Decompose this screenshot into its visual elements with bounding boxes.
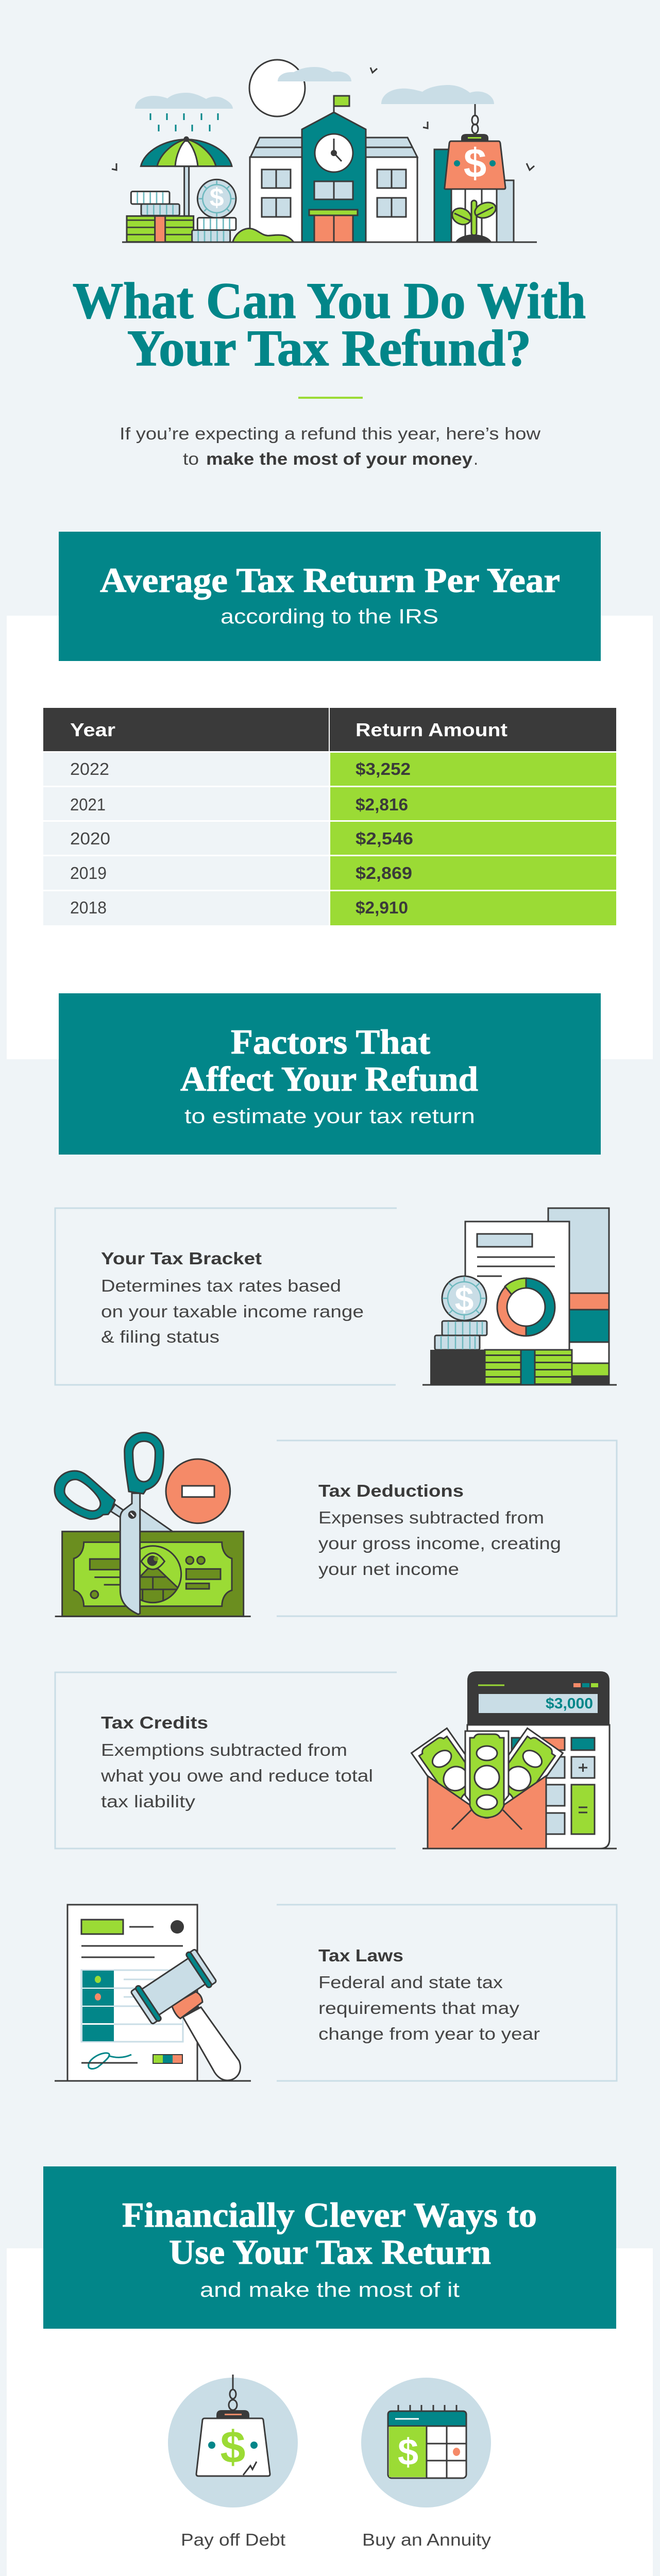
heading: financially clever ways: Financially Clever Ways to bbox=[122, 2195, 537, 2234]
icon: legal document with gavel bbox=[55, 1905, 251, 2081]
heading: factors: Factors That bbox=[231, 1022, 430, 1061]
row 2022: $3,252 bbox=[356, 759, 411, 778]
row 2019: $2,869 bbox=[356, 863, 412, 883]
ground line bbox=[122, 241, 537, 243]
table header: Return Amount bbox=[356, 719, 507, 740]
panel: tax credits bbox=[55, 1672, 397, 1849]
panel: your tax bracket: & filing status bbox=[101, 1327, 219, 1346]
row 2020 bbox=[43, 822, 616, 855]
panel: financially clever ways backdrop bbox=[7, 2248, 653, 2576]
icon: umbrella, coin stacks, cash and bush: $ bbox=[210, 183, 224, 212]
icon: school building bbox=[250, 95, 417, 242]
panel: tax deductions: your net income bbox=[318, 1560, 459, 1579]
panel: tax laws: requirements that may bbox=[318, 1998, 520, 2018]
intro text bbox=[120, 424, 540, 468]
row 2019: 2019 bbox=[70, 863, 107, 883]
hero illustration: town with clock tower, umbrella and weight bbox=[112, 60, 537, 242]
table header bbox=[43, 708, 616, 751]
icon: cloud right bbox=[381, 85, 494, 104]
intro text: to bbox=[183, 449, 199, 468]
row 2019 bbox=[43, 856, 616, 890]
panel: tax deductions: Expenses subtracted from bbox=[318, 1508, 544, 1527]
intro text: . bbox=[473, 449, 478, 468]
item: pay off debt: $ bbox=[221, 2421, 245, 2472]
title: What Can You Do With bbox=[73, 272, 586, 329]
row 2022: 2022 bbox=[70, 759, 109, 778]
panel: tax laws: change from year to year bbox=[318, 2024, 540, 2043]
row 2018 bbox=[43, 891, 616, 925]
table: return by year bbox=[43, 708, 616, 925]
heading: financially clever ways: and make the most of it bbox=[200, 2279, 460, 2301]
panel: tax credits: Exemptions subtracted from bbox=[101, 1740, 347, 1759]
icon: hanging weight with plant bbox=[434, 104, 514, 242]
heading: average tax return: according to the IRS bbox=[221, 605, 438, 628]
intro text: make the most of your money bbox=[206, 449, 473, 468]
panel: tax laws: Tax Laws bbox=[318, 1946, 403, 1965]
heading: factors bbox=[59, 993, 601, 1155]
panel: your tax bracket: Determines tax rates based bbox=[101, 1276, 341, 1295]
icon: rain bbox=[150, 113, 218, 131]
row 2021 bbox=[43, 787, 616, 820]
item: buy an annuity: $ bbox=[398, 2432, 418, 2473]
icon: scissors cutting a dollar bill bbox=[55, 1433, 251, 1616]
icon: cloud left bbox=[135, 93, 233, 109]
icon: document with donut chart, coins and cash: $ bbox=[455, 1280, 473, 1318]
heading: financially clever ways: Use Your Tax Return bbox=[169, 2232, 491, 2272]
heading: average tax return: Average Tax Return Per Year bbox=[100, 561, 560, 600]
item: pay off debt: Pay off Debt bbox=[181, 2530, 285, 2549]
row 2020: 2020 bbox=[70, 829, 110, 848]
row 2021: $2,816 bbox=[356, 795, 408, 814]
title bbox=[73, 272, 586, 377]
panel: tax laws: Federal and state tax bbox=[318, 1973, 503, 1992]
item: buy an annuity: Buy an Annuity bbox=[362, 2530, 492, 2549]
icon: document with donut chart, coins and cash bbox=[422, 1208, 617, 1385]
intro text: If you’re expecting a refund this year, here’s how bbox=[120, 424, 540, 443]
panel: tax credits: tax liability bbox=[101, 1792, 196, 1811]
icon: calculator with envelope of cash: $3,000 bbox=[546, 1696, 593, 1712]
row 2022 bbox=[43, 753, 616, 786]
heading: factors: Affect Your Refund bbox=[180, 1059, 478, 1098]
heading: factors: to estimate your tax return bbox=[184, 1105, 475, 1128]
icon: hanging weight with plant: $ bbox=[464, 140, 486, 186]
icon: sun bbox=[249, 60, 305, 116]
panel: your tax bracket bbox=[55, 1208, 397, 1385]
panel: tax laws bbox=[277, 1905, 617, 2081]
icon: calculator with envelope of cash bbox=[412, 1671, 617, 1849]
table header: Year bbox=[70, 719, 115, 740]
row 2020: $2,546 bbox=[356, 829, 413, 848]
panel: tax credits: what you owe and reduce total bbox=[100, 1766, 373, 1785]
icon: birds bbox=[112, 67, 534, 170]
icon: umbrella, coin stacks, cash and bush bbox=[127, 137, 294, 242]
row 2018: $2,910 bbox=[356, 898, 408, 917]
panel: tax credits: Tax Credits bbox=[101, 1713, 208, 1732]
panel: tax deductions: Tax Deductions bbox=[318, 1481, 464, 1500]
item: buy an annuity bbox=[361, 2378, 492, 2549]
icon: cloud top bbox=[278, 67, 351, 81]
heading: financially clever ways bbox=[43, 2166, 616, 2329]
item: pay off debt bbox=[168, 2375, 298, 2549]
panel: your tax bracket: on your taxable income range bbox=[101, 1302, 364, 1321]
heading: average tax return bbox=[59, 532, 601, 661]
panel: tax deductions bbox=[277, 1440, 617, 1616]
row 2018: 2018 bbox=[70, 898, 107, 917]
panel: average tax return backdrop bbox=[7, 616, 653, 1059]
panel: your tax bracket: Your Tax Bracket bbox=[101, 1249, 262, 1268]
title: Your Tax Refund? bbox=[127, 319, 531, 377]
row 2021: 2021 bbox=[70, 795, 106, 814]
panel: tax deductions: your gross income, creating bbox=[318, 1534, 561, 1553]
